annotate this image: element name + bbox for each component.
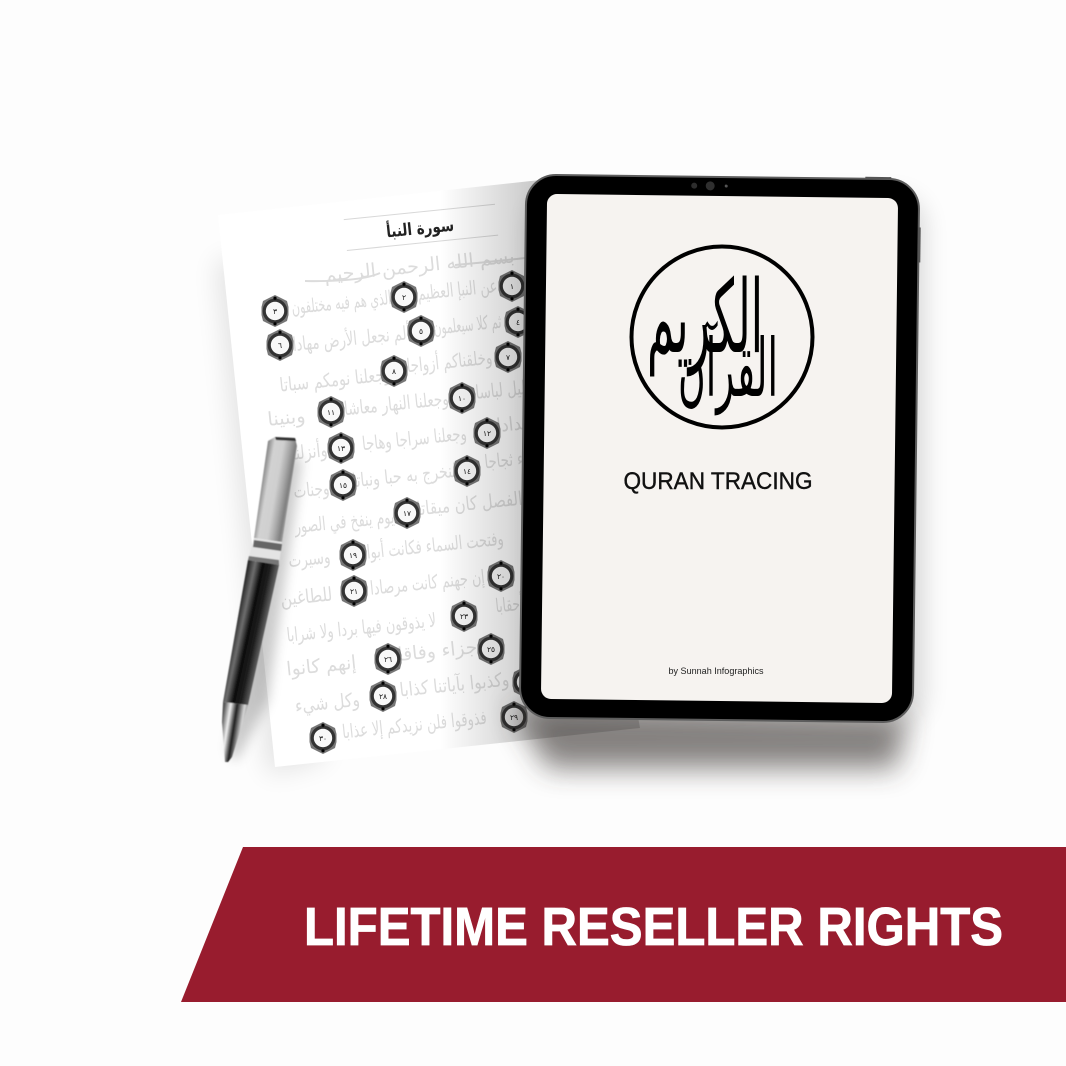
worksheet traced Arabic verses: فذوقوا فلن نزيدكم إلا عذابا <box>341 707 488 744</box>
worksheet traced Arabic verses: جزاء وفاقا <box>396 636 478 666</box>
title: Quran Tracing: QURAN TRACING <box>624 468 812 495</box>
worksheet traced Arabic verses: إنهم كانوا <box>285 652 357 682</box>
worksheet traced Arabic verses: شدادا <box>495 411 537 437</box>
shadow: tablet on page <box>455 180 640 748</box>
verse number markers: ٧ <box>506 353 510 362</box>
worksheet traced Arabic verses: وبنينا <box>266 405 306 431</box>
verse number markers: ٢٣ <box>460 612 468 621</box>
verse number markers: ٢٨ <box>379 692 387 701</box>
icon: pen <box>222 437 297 762</box>
worksheet traced Arabic verses: لا يذوقون فيها بردا ولا شرابا <box>286 610 437 647</box>
worksheet traced Arabic verses: يوم ينفخ في الصور <box>293 506 395 538</box>
banner: lifetime reseller rights <box>181 847 1066 1002</box>
worksheet traced Arabic verses: بسم الله الرحمن الرحيم <box>323 245 516 287</box>
worksheet traced Arabic verses: وجعلنا نومكم سباتا <box>279 363 392 397</box>
pen barrel silver <box>254 437 297 542</box>
worksheet traced Arabic verses: ماء ثجاجا <box>483 447 535 474</box>
worksheet traced Arabic verses: ثم كلا سيعلمون <box>432 311 502 339</box>
worksheet traced Arabic verses: وكل شيء <box>294 689 361 717</box>
tablet cameras <box>691 181 728 191</box>
icon: tablet device <box>520 173 921 722</box>
worksheet traced Arabic verses: أحقابا <box>494 591 524 617</box>
worksheet traced Arabic verses: وأنزلنا <box>290 437 328 465</box>
shadow: paper <box>216 260 325 775</box>
emblem: Al-Quran Al-Karim calligraphy roundel <box>632 246 812 428</box>
verse number markers: ١٣ <box>337 444 345 453</box>
banner text: LIFETIME RESELLER RIGHTS <box>304 897 1003 957</box>
verse number markers: ١٧ <box>403 509 411 518</box>
worksheet traced Arabic verses: الليل لباسا <box>474 376 534 404</box>
tablet side buttons <box>918 227 921 262</box>
verse number markers: ٢٥ <box>487 645 495 654</box>
verse number markers: ٦ <box>278 341 282 350</box>
verse number markers: ١٠ <box>458 394 466 403</box>
verse number markers: ٨ <box>392 367 396 376</box>
pen tip <box>222 702 248 762</box>
pen clip top <box>275 437 296 441</box>
verse number markers: ٢١ <box>350 587 358 596</box>
tablet outer frame <box>520 175 919 722</box>
worksheet traced Arabic verses <box>266 245 537 744</box>
pen barrel black <box>223 560 279 705</box>
byline: by Sunnah Infographics <box>668 666 764 677</box>
verse number markers: ٢ <box>402 293 406 302</box>
worksheet traced Arabic verses: وسيرت <box>287 546 331 572</box>
worksheet traced Arabic verses: وخلقناكم أزواجا <box>405 345 493 377</box>
verse number markers: ٢٩ <box>510 713 518 722</box>
worksheet traced Arabic verses: وفتحت السماء فكانت أبوابا <box>358 526 505 564</box>
verse number markers: ١٩ <box>349 551 357 560</box>
worksheet traced Arabic verses: وجعلنا النهار معاشا <box>343 388 450 420</box>
verse number markers: ١ <box>510 282 514 291</box>
worksheet traced Arabic verses: وجنات <box>292 477 330 503</box>
shadow: tablet below <box>512 708 908 768</box>
verse number markers: ١٥ <box>339 481 347 490</box>
worksheet heading: سورة النبأ <box>385 214 455 242</box>
panel: tracing worksheet page <box>218 180 640 767</box>
verse number markers: ١٢ <box>483 429 491 438</box>
verse number markers: ٣ <box>273 307 277 316</box>
emblem: Al-Quran Al-Karim calligraphy roundel: القرآن <box>678 320 778 416</box>
verse number markers: ٤ <box>516 318 520 327</box>
shadow: pen <box>228 450 302 762</box>
emblem: Al-Quran Al-Karim calligraphy roundel: الكريم <box>647 259 763 377</box>
shadow: tablet side <box>530 195 925 725</box>
worksheet traced Arabic verses: الفصل كان ميقاتا <box>416 488 523 520</box>
worksheet traced Arabic verses: لنخرج به حبا ونباتا <box>351 460 458 492</box>
verse number markers: ٢٦ <box>384 655 392 664</box>
tablet screen <box>541 194 898 703</box>
worksheet heading <box>344 204 498 251</box>
worksheet traced Arabic verses: وجعلنا سراجا وهاجا <box>361 423 468 455</box>
verse number markers: ٢٠ <box>497 572 505 581</box>
worksheet traced Arabic verses: ألم نجعل الأرض مهادا <box>291 320 411 356</box>
verse number markers: ١١ <box>327 408 335 417</box>
verse number markers: ٥ <box>419 327 423 336</box>
verse number markers: ٣٠ <box>319 734 327 743</box>
worksheet traced Arabic verses: الذي هم فيه مختلفون <box>291 287 392 319</box>
worksheet traced Arabic verses: وكذبوا بآياتنا كذابا <box>398 667 510 702</box>
verse number markers <box>262 270 540 754</box>
worksheet traced Arabic verses: للطاغين <box>279 583 333 611</box>
pen rings <box>248 538 282 565</box>
verse number markers: ١٤ <box>463 467 471 476</box>
worksheet traced Arabic verses: عن النبإ العظيم <box>416 275 498 306</box>
worksheet traced Arabic verses: إن جهنم كانت مرصادا <box>369 566 486 601</box>
